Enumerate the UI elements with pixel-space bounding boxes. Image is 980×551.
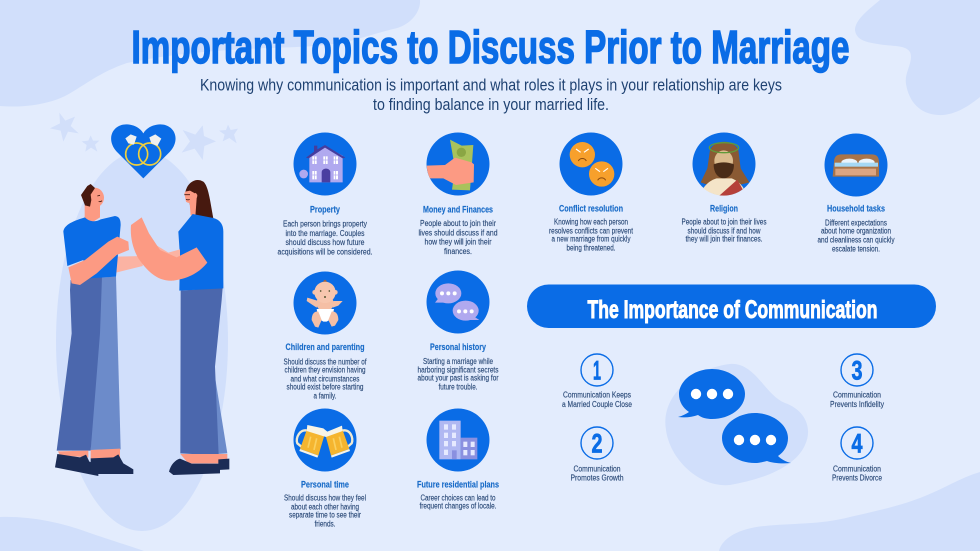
heading: Religion xyxy=(710,204,738,214)
text block: a family. xyxy=(314,392,336,400)
text block: they will join their finances. xyxy=(686,234,762,244)
illustration: couple with heart and rings xyxy=(50,113,238,531)
item 2: promotes growth: 2 xyxy=(592,428,602,458)
heading: Money and Finances xyxy=(423,204,493,216)
item 4: prevents divorce xyxy=(832,427,882,482)
text block: children they envision having xyxy=(284,366,366,374)
text block xyxy=(549,218,634,252)
item 2: promotes growth xyxy=(570,427,624,482)
item 3: prevents infidelity: Communication xyxy=(833,390,881,400)
item 1: keeps couple close: a Married Couple Close xyxy=(562,400,632,409)
icon: beer mugs xyxy=(294,408,356,472)
text block: friends. xyxy=(314,520,336,528)
text block: should exist before starting xyxy=(286,382,364,392)
text block xyxy=(418,219,498,256)
panel: property xyxy=(278,132,372,256)
subtitle xyxy=(200,76,782,114)
item 2: promotes growth: Promotes Growth xyxy=(570,474,624,482)
icon: buildings xyxy=(426,408,490,472)
text block: a new marriage from quickly xyxy=(552,234,630,244)
text block: Starting a marriage while xyxy=(423,357,493,366)
text block: frequent changes of locale. xyxy=(420,502,496,510)
subtitle: to finding balance in your married life. xyxy=(373,96,609,114)
text block: People about to join their xyxy=(420,219,496,228)
illustration: communication speech bubbles xyxy=(665,364,808,485)
item 3: prevents infidelity xyxy=(830,354,884,409)
item 2: promotes growth: Communication xyxy=(574,464,620,474)
panel: children and parenting xyxy=(284,272,367,400)
text block: Different expectations xyxy=(825,218,887,228)
icon: heart with rings xyxy=(111,124,176,178)
text block: Each person brings property xyxy=(283,220,367,228)
icon: angry faces xyxy=(560,132,622,196)
item 3: prevents infidelity: Prevents Infidelity xyxy=(830,400,884,409)
panel: personal time xyxy=(284,408,366,528)
icon: baby xyxy=(294,272,356,334)
panel: personal history xyxy=(418,270,499,392)
text block xyxy=(278,220,372,256)
heading: Conflict resolution xyxy=(559,204,623,214)
item 3: prevents infidelity: 3 xyxy=(852,356,862,386)
panel: household tasks xyxy=(818,134,894,254)
text block xyxy=(418,357,499,392)
text block: about home organization xyxy=(821,226,891,236)
figure: man xyxy=(55,184,143,476)
panel: money and finances xyxy=(418,132,498,256)
icon: speech bubbles xyxy=(426,270,490,334)
text block xyxy=(420,494,496,510)
text block: and cleanliness can quickly xyxy=(818,236,894,244)
icon: house xyxy=(294,132,356,196)
item 4: prevents divorce: Communication xyxy=(833,464,881,474)
text block: separate time to see their xyxy=(289,510,361,520)
heading: Personal history xyxy=(430,342,487,353)
heading: Children and parenting xyxy=(286,342,365,353)
text block: harboring significant secrets xyxy=(418,366,498,374)
icon: hand with money xyxy=(425,132,490,196)
item 1: keeps couple close xyxy=(562,354,632,409)
item 1: keeps couple close: 1 xyxy=(593,356,601,386)
figure: woman xyxy=(131,180,229,475)
text block xyxy=(818,218,894,254)
text block: about your past is asking for xyxy=(418,374,499,382)
text block: resolves conflicts can prevent xyxy=(549,226,634,236)
icon: stars xyxy=(50,113,238,160)
subtitle: Knowing why communication is important and what roles it plays in your relationship are keys xyxy=(200,76,782,94)
text block xyxy=(284,358,367,400)
item 1: keeps couple close: Communication Keeps xyxy=(563,390,631,400)
text block: Should discuss how they feel xyxy=(284,494,366,502)
heading: Property xyxy=(310,204,341,216)
text block: Career choices can lead to xyxy=(420,494,496,502)
panel: religion xyxy=(682,132,766,244)
text block: People about to join their lives xyxy=(682,218,766,226)
icon: religious figure xyxy=(692,132,756,197)
text block: how they will join their xyxy=(424,238,492,246)
panel: conflict resolution xyxy=(549,132,634,252)
text block: being threatened. xyxy=(566,244,616,252)
banner: the importance of communication xyxy=(527,284,936,328)
heading: Personal time xyxy=(301,480,349,490)
text block xyxy=(284,494,366,528)
text block: should discuss how future xyxy=(286,238,365,247)
text block: acquisitions will be considered. xyxy=(278,248,372,256)
text block: into the marriage. Couples xyxy=(286,229,364,238)
heading: Future residential plans xyxy=(417,480,499,490)
panel: future residential plans xyxy=(417,408,499,510)
icon: bed xyxy=(824,134,888,196)
text block: Should discuss the number of xyxy=(284,358,367,366)
item 4: prevents divorce: 4 xyxy=(852,428,862,458)
heading: Household tasks xyxy=(827,204,885,214)
text block: Knowing how each person xyxy=(554,218,628,226)
text block: about each other having xyxy=(291,502,359,512)
text block: and what circumstances xyxy=(290,374,360,384)
text block: escalate tension. xyxy=(832,244,880,254)
text block: should discuss if and how xyxy=(688,226,761,236)
text block: future trouble. xyxy=(438,382,478,392)
text block: lives should discuss if and xyxy=(418,228,498,238)
text block: finances. xyxy=(444,247,472,256)
text block xyxy=(682,218,766,244)
item 4: prevents divorce: Prevents Divorce xyxy=(832,474,882,482)
